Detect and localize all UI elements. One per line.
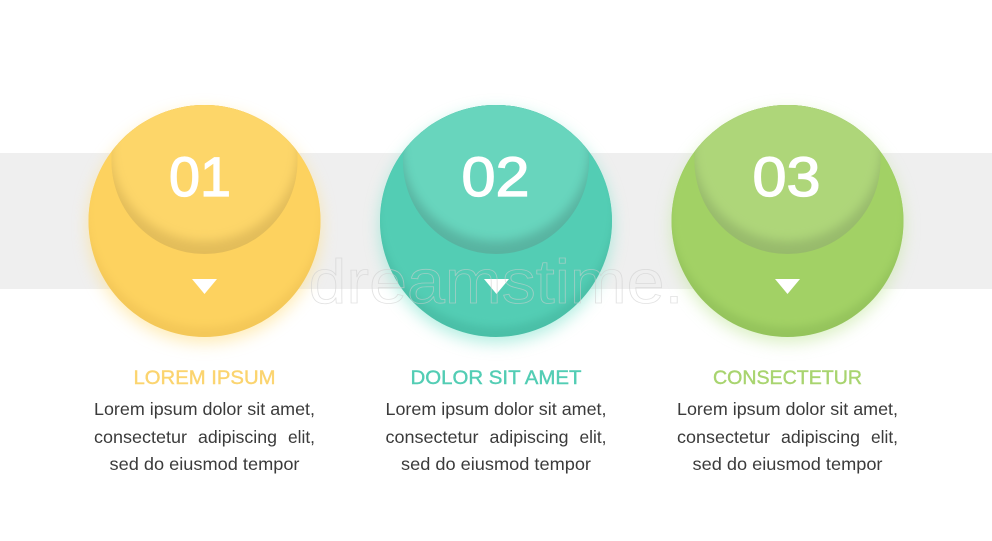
description 3: sed do eiusmod tempor	[692, 454, 883, 474]
description 3	[677, 399, 898, 474]
description 1: elit,	[288, 427, 315, 447]
number 02: 02	[462, 145, 530, 208]
circle 3: green	[664, 103, 910, 351]
description 2: elit,	[580, 427, 606, 447]
number 01: 01	[169, 145, 231, 208]
arrow	[192, 279, 217, 294]
description 1: sed do eiusmod tempor	[110, 454, 300, 474]
column 2 text	[386, 368, 606, 474]
watermark: dreamstime.	[308, 248, 684, 317]
description 1: consectetur	[94, 427, 187, 447]
background band	[0, 153, 992, 289]
description 1: Lorem ipsum dolor sit amet,	[94, 399, 315, 419]
description 2: consectetur	[386, 427, 479, 447]
description 2: sed do eiusmod tempor	[401, 454, 591, 474]
arrow	[484, 279, 509, 294]
column 3 text	[677, 368, 898, 474]
description 3: adipiscing	[781, 427, 860, 447]
description 1	[94, 399, 315, 474]
description 3: consectetur	[677, 427, 770, 447]
description 2: adipiscing	[490, 427, 568, 447]
description 2	[386, 399, 606, 474]
description 1: adipiscing	[198, 427, 277, 447]
title: consectetur: CONSECTETUR	[713, 368, 862, 389]
description 3: Lorem ipsum dolor sit amet,	[677, 399, 898, 419]
number 03: 03	[752, 145, 820, 208]
title: lorem ipsum: LOREM IPSUM	[134, 368, 276, 389]
column 1 text	[94, 368, 315, 474]
arrow	[775, 279, 800, 294]
circle 1: yellow	[86, 53, 322, 343]
circle 2: teal	[378, 53, 614, 343]
title: dolor sit amet: DOLOR SIT AMET	[410, 368, 582, 389]
description 3: elit,	[871, 427, 898, 447]
description 2: Lorem ipsum dolor sit amet,	[386, 399, 606, 419]
